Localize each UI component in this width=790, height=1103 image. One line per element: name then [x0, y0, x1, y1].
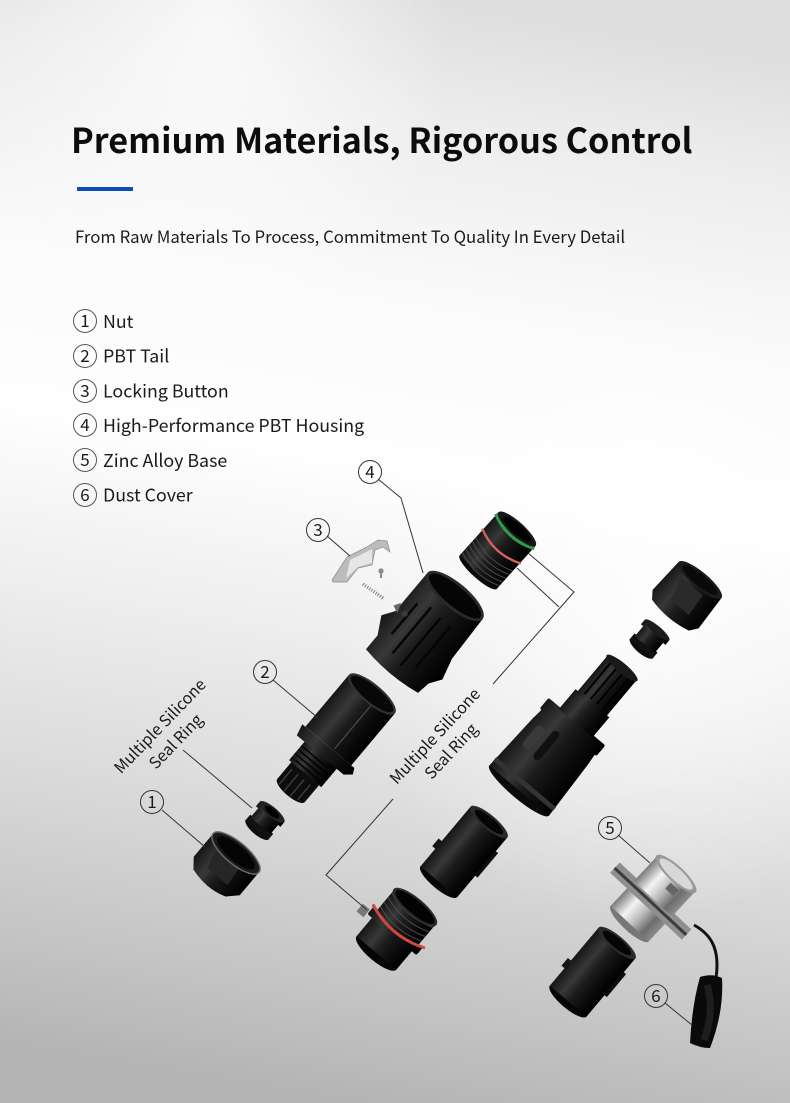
- part: threaded insert with green and red seal rings: [455, 506, 541, 594]
- part: threaded flange with red seal ring: [339, 873, 447, 981]
- part: lower insert: [542, 920, 642, 1024]
- label: right silicone seal ring: Seal Ring: [418, 717, 482, 784]
- part: PBT housing 4: [356, 558, 497, 702]
- legend item 3: 3: [80, 377, 90, 402]
- part: nut 1: [185, 825, 266, 906]
- callout: 3: 3: [313, 516, 323, 541]
- title: Premium Materials, Rigorous Control: [71, 113, 693, 163]
- part: tether cable: [694, 925, 717, 978]
- part: small seal 2: [626, 617, 672, 662]
- title accent bar: [77, 187, 133, 191]
- callout: 6: [644, 982, 668, 1008]
- part: zinc alloy base 5: [589, 835, 717, 962]
- callout: 4: [358, 458, 382, 484]
- legend item 1: Nut: [103, 308, 134, 334]
- callout: 4: 4: [365, 458, 375, 483]
- part: dust cover 6: [690, 975, 722, 1048]
- legend item 3: Locking Button: [103, 378, 229, 404]
- leader lines: [162, 479, 692, 1025]
- part: PBT tail 2: [261, 664, 407, 819]
- callout: 2: 2: [260, 658, 270, 683]
- label: right silicone seal ring: Multiple Silicone: [383, 682, 485, 789]
- parts legend: [74, 307, 364, 508]
- part: assembled connector body: [484, 639, 655, 822]
- legend item 1: [74, 307, 134, 334]
- callout: 1: [140, 788, 164, 814]
- callout: 3: [306, 516, 330, 542]
- legend item 2: [74, 342, 169, 368]
- part: locking button 3: [332, 540, 390, 598]
- legend item 2: PBT Tail: [103, 342, 169, 368]
- part: small seal 1: [242, 798, 287, 844]
- legend item 6: Dust Cover: [103, 482, 193, 508]
- part: middle insert: [413, 799, 514, 904]
- label: left silicone seal ring: Seal Ring: [142, 707, 207, 773]
- callout: 5: [598, 814, 622, 840]
- subtitle: From Raw Materials To Process, Commitment To Quality In Every Detail: [75, 224, 625, 248]
- callout: 1: 1: [147, 788, 157, 813]
- legend item 1: 1: [80, 307, 90, 332]
- legend item 4: High-Performance PBT Housing: [103, 412, 364, 438]
- legend item 5: 5: [80, 446, 90, 471]
- part: dome nut: [646, 555, 728, 637]
- callout: 5: 5: [605, 814, 615, 839]
- legend item 4: 4: [80, 411, 90, 436]
- callout: 6: 6: [651, 982, 661, 1007]
- legend item 5: Zinc Alloy Base: [103, 447, 227, 473]
- legend item 2: 2: [80, 342, 90, 367]
- callout: 2: [254, 658, 276, 684]
- legend item 6: 6: [80, 481, 90, 506]
- label: left silicone seal ring: Multiple Silicone: [107, 672, 211, 778]
